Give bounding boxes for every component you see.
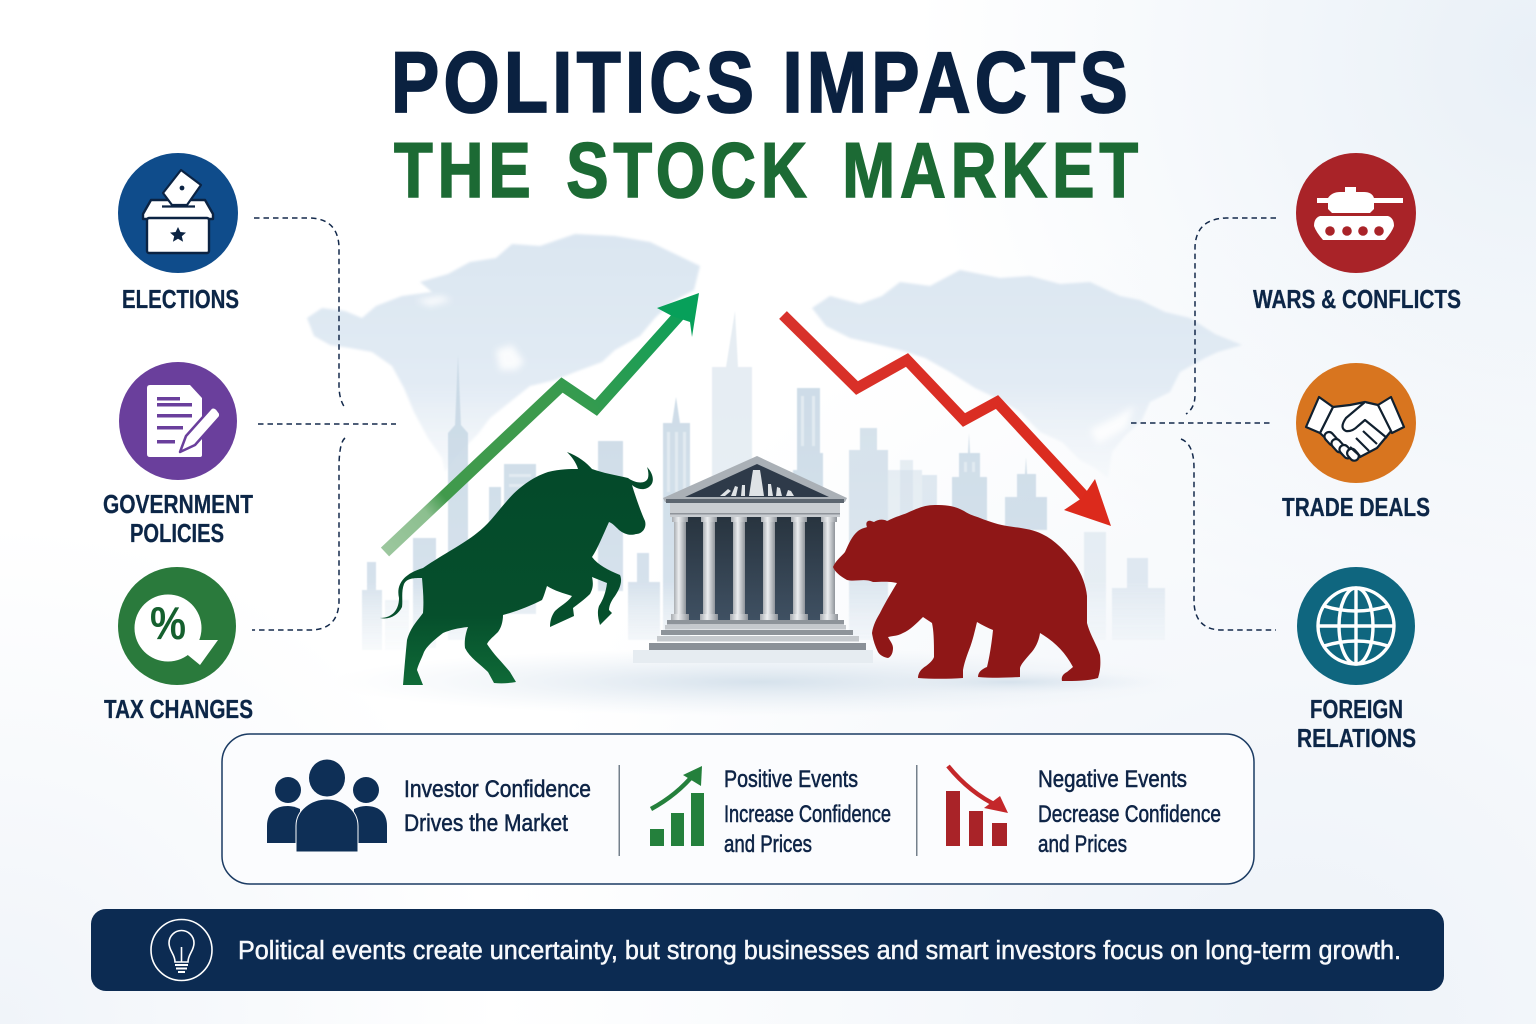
columns [671, 517, 838, 620]
icon: tax changes percent arrow [118, 567, 236, 685]
label: elections: ELECTIONS [122, 284, 239, 314]
icon: trade deals handshake [1296, 363, 1416, 483]
map highlights [416, 296, 1134, 444]
title: THE STOCK MARKET [394, 126, 1143, 214]
text: negative events: and Prices [1038, 831, 1127, 858]
connector lines left [252, 218, 396, 630]
city skyline [362, 311, 1165, 650]
text: investor confidence: Drives the Market [404, 810, 568, 837]
text: negative events [1038, 766, 1221, 858]
icon: tax changes percent arrow: % [150, 597, 186, 649]
icon: investors group [267, 760, 387, 852]
label: government policies [103, 489, 253, 548]
connector lines right [1131, 218, 1276, 630]
icon: foreign relations globe [1297, 567, 1415, 685]
label: foreign relations: FOREIGN [1310, 694, 1403, 724]
title [391, 35, 1143, 214]
bottom banner [91, 909, 1444, 991]
world map background [307, 234, 1242, 478]
pediment figures [720, 470, 794, 496]
icon: wars tank [1296, 153, 1416, 273]
summary panel [222, 734, 1254, 884]
label: foreign relations [1297, 694, 1416, 753]
steps [649, 620, 866, 650]
icon: elections ballot box [118, 153, 238, 273]
title: POLITICS IMPACTS [391, 35, 1132, 131]
ground shadow [330, 648, 1190, 716]
label: trade deals: TRADE DEALS [1282, 492, 1430, 522]
arrow: falling red trend [783, 315, 1111, 526]
arrow: rising green trend [385, 293, 699, 552]
text: positive events: Positive Events [724, 766, 858, 793]
banner message: Political events create uncertainty, but strong businesses and smart investors focus on long-term growth. [238, 937, 1401, 965]
text: positive events: Increase Confidence [724, 801, 891, 828]
icon: light bulb [151, 920, 212, 980]
text: investor confidence [404, 776, 591, 837]
label: foreign relations: RELATIONS [1297, 723, 1416, 753]
bear silhouette [833, 505, 1100, 681]
stock exchange building [633, 456, 873, 663]
label: tax changes: TAX CHANGES [104, 694, 253, 724]
label: wars and conflicts: WARS & CONFLICTS [1253, 284, 1461, 314]
text: negative events: Decrease Confidence [1038, 801, 1221, 828]
bull silhouette [380, 452, 653, 685]
icon: falling bars [946, 766, 1008, 846]
icon: government policies document [119, 362, 237, 480]
text: positive events: and Prices [724, 831, 812, 858]
label: government policies: GOVERNMENT [103, 489, 253, 519]
text: investor confidence: Investor Confidence [404, 776, 591, 803]
icon: rising bars [650, 766, 704, 846]
label: government policies: POLICIES [130, 518, 224, 548]
text: negative events: Negative Events [1038, 766, 1187, 793]
text: positive events [724, 766, 891, 858]
